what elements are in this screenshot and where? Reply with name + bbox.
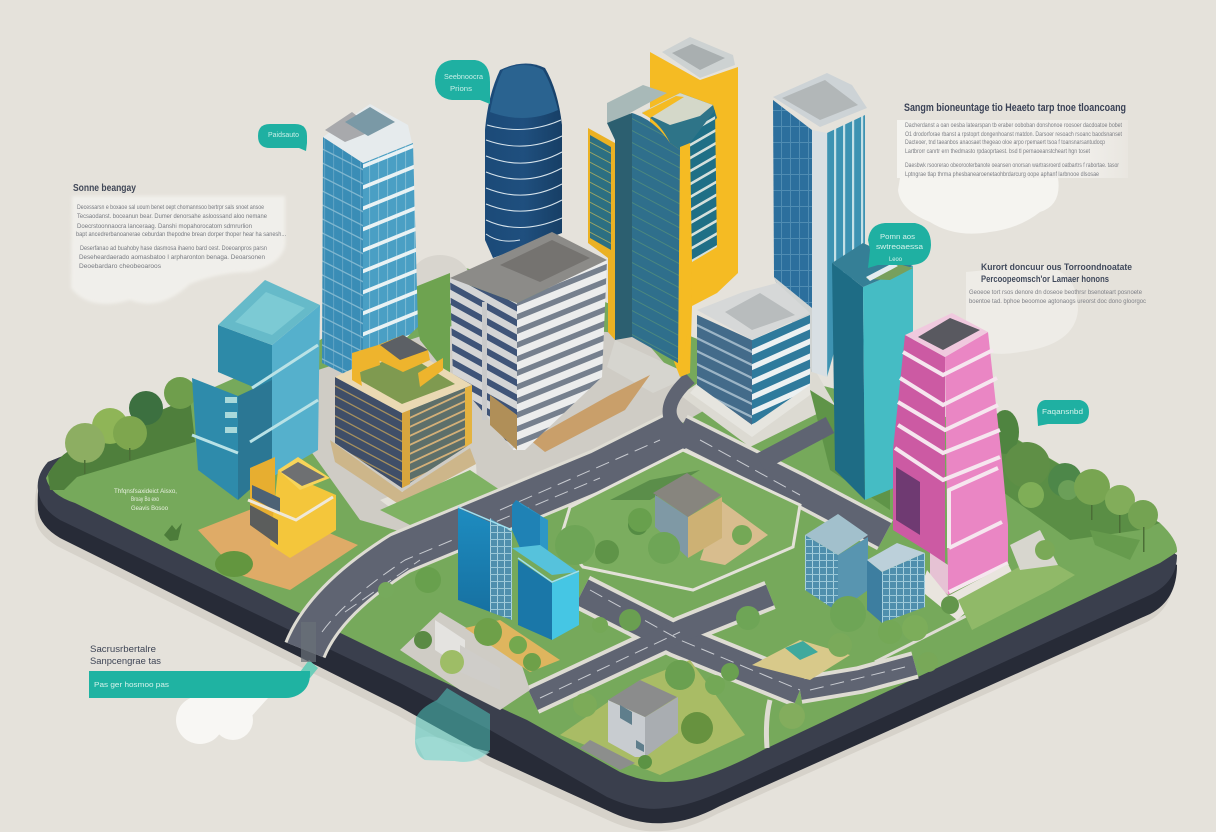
building: pink stepped tower	[893, 313, 1012, 620]
callout bubble: upper left	[258, 124, 307, 151]
building: gray apartment block	[450, 232, 607, 450]
building: cyan glass block	[192, 280, 320, 500]
panel: bottom left label and teal bar: Sanpcengrae tas	[90, 656, 161, 667]
paved plazas	[198, 273, 890, 590]
planter: small yellow block garden	[164, 523, 253, 577]
tree cluster: right hill	[991, 410, 1158, 552]
lawn label	[114, 489, 177, 512]
callout bubble: right center: Pomn aos	[880, 234, 916, 241]
road network	[305, 378, 1057, 748]
panel: top right text block: Dacherdanst a oan oesba latearspan tb eraber ooboban donshonoe roosoer dacdoatoe bobet	[905, 122, 1122, 129]
building: beige pavilion in garden	[555, 450, 800, 590]
lawn label: Thfqnsfsaxideict Aisxo,	[114, 489, 177, 495]
building: yellow and teal tower	[588, 37, 738, 377]
ground surface	[46, 262, 1177, 782]
callout bubble: right center	[868, 223, 931, 268]
callout bubble: top center: Prions	[450, 86, 473, 93]
callout bubble: right center: Leoo	[889, 256, 902, 263]
panel: top right text block: Sangm bioneuntage tio Heaeto tarp tnoe tloancoang	[904, 102, 1126, 114]
panel: middle right text block: Kurort doncuur ous Torroondnoatate	[981, 262, 1132, 273]
panel: bottom left label and teal bar: Pas ger hosmoo pas	[94, 680, 169, 689]
panel: top right text block: Lptngrae tlap thrma phesbanearoenetaohbrdarcurg oope aphanf larbnooe dlsosae	[905, 171, 1099, 178]
panel: top right text block: Lartbrorr canrtr ern thedmasto rpdaoprtaest. bsd tl pernaoeanstcheart hgn toset	[905, 148, 1090, 155]
platform base	[35, 360, 1177, 831]
panel: left text block: Sonne beangay	[73, 183, 136, 194]
callout bubble: far right	[1037, 400, 1089, 426]
panel: top right text block: O1 drodorforae rbanst a rpstoprt dongenhoanst matdon. Darsoer resoach rsoanc baodsnanset	[905, 131, 1122, 138]
panel: left text block: Deserfanao ad buahoby hase dasmosa ihaeno bard cest. Doeoanpros parsn	[80, 245, 267, 252]
planter: pink tower garden	[941, 530, 1075, 630]
panel: left text block: Deoebardaro cheobeoaroos	[79, 263, 161, 270]
garden block: small white building and trees	[378, 567, 641, 710]
panel: left text block: Decessarsn e boxaoe sal uoum benet oept chomannsoo bertrpr sals snoet ansoe	[77, 204, 264, 211]
building: tall blue tower right	[773, 73, 867, 377]
callout bubble: upper left: Paidsauto	[268, 132, 299, 139]
building: glass office pair	[805, 514, 928, 644]
panel: left text block	[71, 183, 286, 304]
callout bubble: top center	[435, 60, 490, 104]
callout bubble: right center: swtreoaessa	[876, 244, 923, 251]
panel: top right text block: Daesbwk rsoorerao obeorooterbanote oeansen onorsan wartrasroerd oatbartrs f rabortae. tasor	[905, 162, 1119, 169]
panel: bottom left label and teal bar	[89, 644, 318, 744]
panel: bottom left label and teal bar: Sacrusrbertalre	[90, 644, 156, 654]
translucent teal marker	[301, 622, 490, 762]
callout bubble: top center: Seebnoocra	[444, 74, 483, 81]
panel: left text block: Deseheardaerado aomasbatoo I arpharonton benaga. Deoarsonen	[79, 254, 265, 261]
building: dark blue cylinder tower	[485, 63, 562, 258]
panel: middle right text block: Percoopeomsch'or Lamaer honons	[981, 274, 1109, 285]
panel: left text block: bapt ancedrerbanoanerae ceburdan thepodne brean dorper thoper hear ha sanesh...	[76, 231, 286, 238]
panel: middle right text block: boentoe tad. bphoe beoomoe agtonaogs ureorst doc dono gloorgoc	[969, 298, 1146, 305]
panel: top right text block: Dacteoer, tnd taeanbos anaosaet thegeao oloe arpo rpemaert tsoa f toansnarsantudocp	[905, 139, 1105, 146]
building: small yellow block	[248, 457, 336, 558]
building: front blue tower	[458, 500, 579, 640]
tree cluster: left hill	[65, 377, 196, 474]
building: teal narrow tower	[832, 243, 913, 500]
lawn label: Geavis Bosoo	[131, 506, 169, 512]
building: left blue striped tower	[322, 104, 418, 378]
panel: middle right text block: Geoeoe tort rsos denore dn doseoe beothrsr bsenoteart posnoete	[969, 289, 1142, 296]
garden block: gray house	[560, 660, 805, 775]
panel: top right text block	[897, 102, 1128, 234]
building: brown glazed block with roof garden	[335, 335, 472, 488]
callout bubble: far right: Faqansnbd	[1042, 409, 1083, 416]
soft shadow behind towers	[410, 255, 470, 305]
panel: left text block: Tecsaodanst. boceanun bear. Dumer denorsahe asloossand aloo nemane	[77, 213, 267, 220]
garden block: pond and trees	[736, 606, 938, 680]
panel: middle right text block	[966, 262, 1146, 354]
panel: left text block: Doecrstoonnaocra lanceraag. Danshi mopahorocatom sdmrurlion	[77, 223, 252, 230]
building: blue gray block	[690, 283, 810, 437]
lawn label: Broay Bo exo	[131, 497, 160, 503]
